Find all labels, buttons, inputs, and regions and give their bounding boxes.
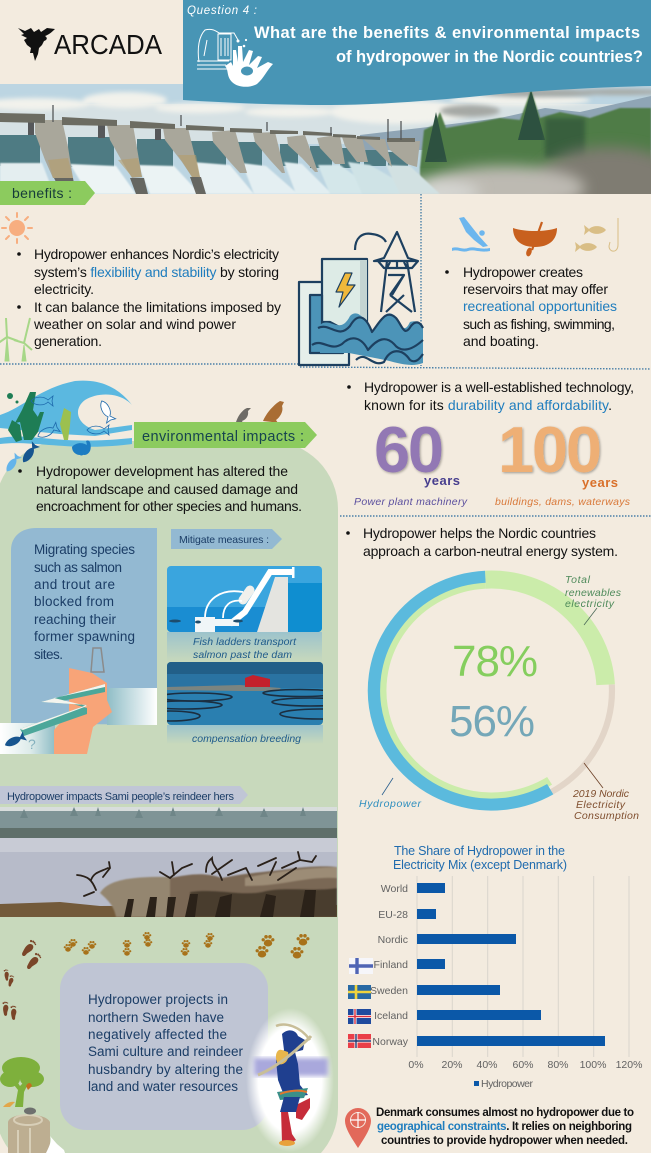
icon: birds	[236, 401, 284, 423]
icon: hydropower plant	[299, 232, 423, 365]
donut chart	[374, 577, 612, 805]
donut label: hydropower	[359, 778, 422, 810]
category labels: Finland	[374, 959, 408, 971]
donut label: hydropower: Hydropower	[359, 798, 422, 810]
axis labels: 0%	[408, 1059, 424, 1071]
donut label: total renewables: renewables	[565, 587, 622, 599]
photo: reindeer by the water	[0, 807, 337, 917]
header title: of hydropower in the Nordic countries?	[336, 48, 643, 66]
donut percentages: 56%	[449, 697, 535, 746]
stat: 60 years: 60	[374, 413, 444, 486]
panel: migrating species	[0, 528, 157, 754]
donut percentages	[449, 637, 538, 746]
paw prints	[64, 932, 309, 959]
carbon-neutral text	[346, 525, 618, 559]
stat: 100 years: buildings, dams, waterways	[495, 496, 631, 508]
image: compensation breeding	[167, 662, 323, 725]
stat: 60 years: years	[424, 473, 460, 488]
chart title	[393, 844, 567, 872]
recreational opportunities text	[445, 264, 617, 349]
mitigate measures tab: Mitigate measures :	[179, 534, 269, 546]
stat: 100 years: 100	[498, 413, 602, 486]
axis labels: 60%	[512, 1059, 534, 1071]
icon: waterfall and hand	[197, 29, 273, 87]
panel: migrating species: sites.	[34, 647, 63, 662]
caption: fish ladders	[167, 632, 322, 662]
benefits text: flexibility and stability: Hydropower enhances Nordic’s electricity	[34, 246, 279, 262]
panel: migrating species: Migrating species	[34, 542, 135, 557]
panel: Sami culture text: husbandry by altering the	[88, 1062, 243, 1077]
durability text: Hydropower is a well-established technology,	[364, 379, 634, 395]
header title: What are the benefits & environmental impacts	[254, 24, 640, 42]
header wave panel	[183, 0, 651, 105]
panel: Sami culture text	[60, 963, 268, 1130]
caption: fish ladders: salmon past the dam	[193, 649, 292, 661]
panel: migrating species: ?	[28, 736, 36, 752]
benefits tab: benefits :	[12, 185, 72, 201]
stat: 100 years: years	[582, 475, 618, 490]
recreational opportunities text: such as fishing, swimming,	[463, 316, 615, 332]
environmental impacts tab	[134, 422, 317, 448]
durability text	[347, 379, 634, 413]
illustration: Sami dancer	[246, 1008, 334, 1152]
reindeer tab: Hydropower impacts Sami people’s reindeer hers	[7, 791, 234, 803]
benefits text: flexibility and stability: It can balance the limitations imposed by	[34, 299, 281, 315]
Denmark note: Denmark consumes almost no hydropower due to	[376, 1107, 634, 1119]
panel: migrating species: such as salmon	[34, 560, 122, 575]
logo panel	[0, 0, 183, 84]
donut label: Nordic electricity consumption: 2019 Nordic	[572, 788, 630, 800]
axis labels: 100%	[580, 1059, 606, 1071]
flag: Sweden	[348, 985, 371, 999]
donut label: total renewables	[565, 574, 622, 625]
donut label: Nordic electricity consumption	[572, 763, 639, 822]
environmental impacts tab: environmental impacts :	[142, 429, 304, 445]
stat: 100 years	[495, 413, 631, 508]
panel: Sami culture text: Sami culture and reindeer	[88, 1044, 244, 1059]
landscape impact text: encroachment for other species and humans.	[36, 498, 302, 514]
Denmark note: geographical constraints. It relies on neighboring	[377, 1121, 632, 1133]
illustration: tree with stump	[0, 1057, 65, 1153]
benefits text: flexibility and stability: electricity.	[34, 281, 94, 297]
recreational opportunities text: Hydropower creates	[463, 264, 583, 280]
dotted dividers	[0, 194, 651, 516]
recreational opportunities text: reservoirs that may offer	[463, 281, 608, 297]
carbon-neutral text: Hydropower helps the Nordic countries	[363, 525, 596, 541]
carbon-neutral text: approach a carbon-neutral energy system.	[363, 543, 618, 559]
icon: canoe	[513, 222, 557, 257]
axis labels: 40%	[476, 1059, 498, 1071]
legend: Hydropower	[481, 1078, 534, 1090]
category labels: World	[381, 883, 408, 895]
ARCADA logo: ARCADA	[54, 29, 163, 60]
landscape impact text: natural landscape and caused damage and	[36, 481, 298, 497]
recreational opportunities text: recreational opportunities	[463, 298, 617, 314]
category labels: Nordic	[378, 934, 408, 946]
flag: Finland	[349, 958, 373, 974]
panel: migrating species: blocked from	[34, 594, 114, 609]
image: fish ladder	[167, 566, 322, 632]
stat: 60 years: Power plant machinery	[354, 496, 468, 508]
panel: Sami culture text: northern Sweden have	[88, 1010, 224, 1025]
donut label: Nordic electricity consumption: Consumption	[574, 810, 639, 822]
category labels: EU-28	[378, 909, 408, 921]
mitigate measures tab	[171, 529, 282, 549]
chart title: Electricity Mix (except Denmark)	[393, 858, 567, 872]
benefits text: flexibility and stability: weather on solar and wind power	[33, 316, 236, 332]
panel: migrating species: reaching their	[34, 612, 116, 627]
axis labels: 20%	[441, 1059, 463, 1071]
benefits tab	[0, 181, 95, 205]
landscape impact text: Hydropower development has altered the	[36, 463, 288, 479]
category labels	[370, 883, 409, 1048]
icon: wind turbines	[0, 318, 32, 361]
donut label: total renewables: electricity	[565, 598, 615, 610]
caption: fish ladders: Fish ladders transport	[193, 636, 297, 648]
category labels: Sweden	[370, 985, 408, 997]
chart title: The Share of Hydropower in the	[394, 844, 565, 858]
panel: environmental impacts	[0, 441, 338, 1153]
flag: Iceland	[348, 1009, 371, 1024]
ARCADA logo	[18, 28, 163, 61]
landscape impact text	[18, 463, 302, 514]
category labels: Norway	[372, 1036, 409, 1048]
icon: sun	[2, 213, 32, 243]
donut label: Nordic electricity consumption: Electricity	[576, 799, 626, 811]
bars	[417, 883, 605, 1046]
icon: wave with sea life	[0, 381, 132, 474]
caption: compensation breeding: compensation breeding	[192, 733, 301, 745]
icon: swimmer	[452, 217, 490, 252]
footprints	[2, 939, 42, 1020]
donut label: total renewables: Total	[565, 574, 591, 586]
panel: migrating species: and trout are	[34, 577, 115, 592]
icon: map pin	[345, 1108, 371, 1148]
Denmark note	[376, 1107, 634, 1147]
reindeer tab	[0, 786, 248, 804]
hero photo: dam with spillways	[0, 84, 651, 194]
benefits text: flexibility and stability: system’s flexibility and stability by storing	[34, 264, 279, 280]
axis labels: 80%	[547, 1059, 569, 1071]
category labels: Iceland	[374, 1010, 408, 1022]
header title	[254, 24, 643, 66]
caption: compensation breeding	[167, 725, 323, 745]
Denmark note: countries to provide hydropower when needed.	[381, 1135, 628, 1147]
panel: Sami culture text: negatively affected the	[88, 1027, 227, 1042]
bar chart: share of hydropower	[370, 844, 642, 1090]
panel: Sami culture text: Hydropower projects in	[88, 992, 228, 1007]
panel: Sami culture text: land and water resources	[88, 1079, 238, 1094]
axis labels: 120%	[616, 1059, 642, 1071]
question label: Question 4 :	[187, 5, 257, 17]
icon: fish and hook	[575, 218, 618, 252]
axis labels	[408, 1059, 642, 1071]
panel: migrating species: former spawning	[34, 629, 135, 644]
flag: Norway	[348, 1034, 371, 1048]
donut percentages: 78%	[452, 637, 538, 686]
benefits text: flexibility and stability: generation.	[34, 333, 102, 349]
recreational opportunities text: and boating.	[463, 333, 539, 349]
benefits text: flexibility and stability	[17, 246, 281, 349]
stat: 60 years	[354, 413, 468, 508]
durability text: known for its durability and affordability.	[364, 397, 612, 413]
